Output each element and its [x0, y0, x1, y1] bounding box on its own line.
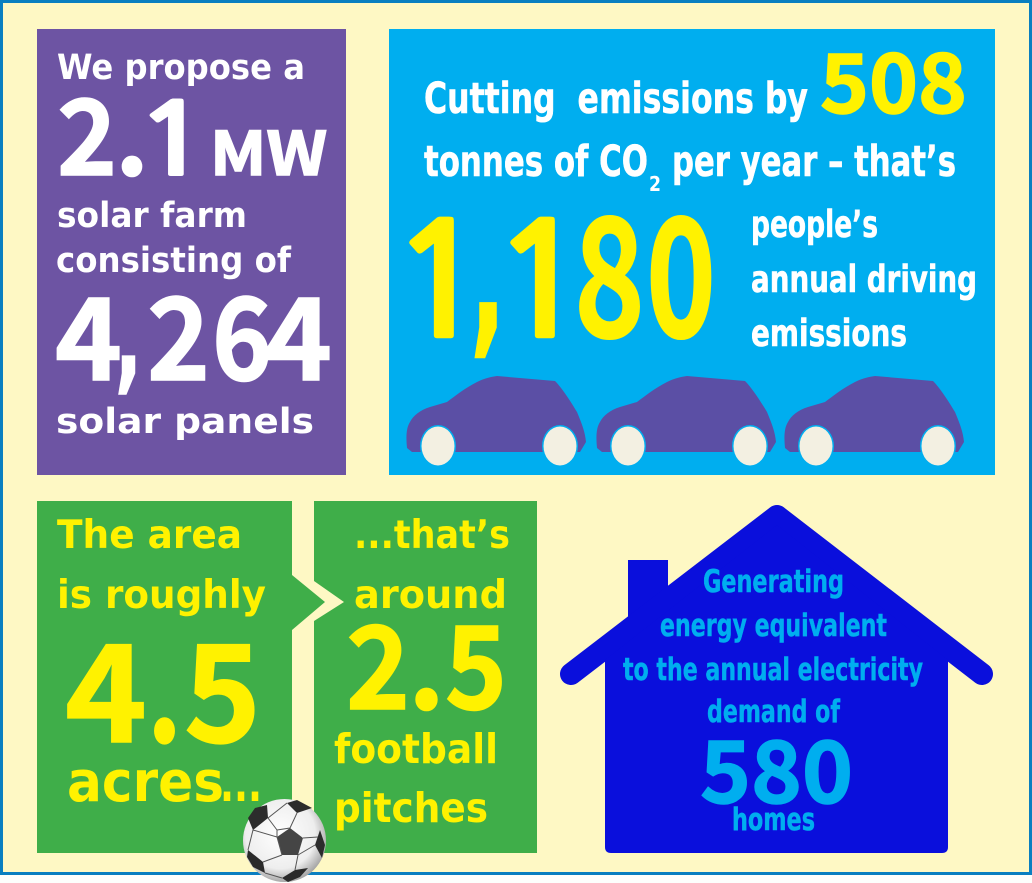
stat: 4,264	[55, 248, 332, 413]
text: tonnes of CO2 per year: 2	[649, 172, 661, 196]
stat: 1,180: ,	[470, 181, 506, 373]
icon: house body	[605, 525, 948, 853]
stat: 2.5: 2	[346, 577, 410, 743]
text: generating energy equivalent: Generating	[703, 564, 844, 600]
text: that's around: around	[354, 573, 507, 618]
text: the area is roughly: is roughly	[57, 573, 266, 618]
text: we propose a: We propose a	[57, 48, 305, 88]
text: solar farm consisting of: consisting of	[56, 241, 292, 281]
text: generating energy equivalent: energy equivalent	[660, 608, 887, 644]
text: solar farm consisting of: solar farm	[57, 196, 247, 236]
stat: 4,264: ,	[115, 272, 142, 405]
stat: 2.5: .	[408, 577, 445, 743]
stat: 1,180: 1	[489, 204, 593, 361]
stat: 2.1 MW	[57, 54, 327, 206]
stat: 508: 508	[820, 18, 967, 137]
stat: 2.5	[346, 577, 507, 743]
stat: 4.5: 4	[65, 585, 147, 781]
text: acres: ...	[220, 755, 262, 813]
panel: emissions	[388, 18, 995, 475]
text: people's annual driving emissions: people’s	[751, 203, 878, 246]
stat: 4,264: 4	[265, 248, 332, 413]
text: people's annual driving emissions	[751, 203, 977, 355]
stat: 2.1 MW: MW	[210, 106, 327, 193]
text: that's around: ...that’s	[354, 513, 510, 558]
icon: car 3	[784, 376, 964, 472]
stat: 1,180: 0	[646, 146, 716, 385]
icon: car 1	[406, 376, 586, 472]
icon: chimney	[628, 560, 668, 622]
icon: roof	[571, 516, 982, 674]
text: the area is roughly: The area	[57, 513, 242, 558]
text: generating energy equivalent	[623, 564, 923, 730]
stat: 4.5: 5	[184, 585, 261, 781]
stat: 1,180	[388, 146, 716, 385]
stat: 4,264: 4	[55, 248, 122, 413]
text: solar panels: solar panels	[56, 402, 314, 442]
panel: proposal	[37, 29, 346, 475]
stat: 2.1 MW: .	[115, 54, 149, 206]
text: solar farm consisting of	[56, 196, 292, 281]
text: acres: acres	[67, 750, 224, 815]
text: generating energy equivalent: to the annual electricity	[623, 652, 923, 688]
icon: car 2	[596, 376, 776, 472]
stat: 2.1 MW: 2	[57, 54, 117, 206]
stat: 1,180: 8	[574, 146, 645, 385]
stat: 4.5: .	[147, 585, 182, 781]
text: that's around	[354, 513, 510, 618]
stat: 2.1 MW: 1	[134, 91, 212, 190]
stat: 4,264: 6	[212, 248, 272, 413]
text: football pitches	[334, 725, 498, 832]
stat: 4,264: 2	[147, 248, 210, 413]
stat: 4.5	[65, 585, 261, 781]
text: generating energy equivalent: demand of	[707, 694, 840, 730]
icon: football	[243, 799, 326, 882]
text: homes: homes	[732, 802, 815, 838]
text: football pitches: football	[334, 725, 498, 773]
text: the area is roughly	[57, 513, 266, 618]
panel: area	[37, 501, 325, 853]
text: football pitches: pitches	[334, 784, 488, 832]
text: people's annual driving emissions: emissions	[751, 312, 907, 355]
panel: pitches	[314, 501, 537, 853]
text: cutting emissions by: Cutting emissions by	[424, 74, 808, 124]
stat: 1,180: 1	[388, 204, 492, 361]
stat: 2.5: 5	[445, 577, 507, 743]
text: tonnes of CO2 per year	[424, 137, 956, 196]
text: tonnes of CO2 per year: tonnes of CO	[424, 137, 648, 187]
panel: house	[571, 516, 982, 853]
stat: 580: 580	[700, 703, 853, 828]
